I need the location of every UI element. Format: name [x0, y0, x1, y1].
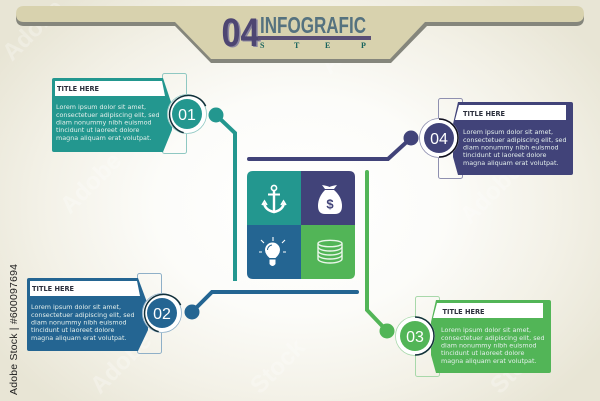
title: 04 INFOGRAFIC STEP: 04 — [222, 11, 260, 55]
title: 04 INFOGRAFIC STEP: P — [361, 41, 366, 50]
icon: anchor — [262, 185, 286, 212]
central icon grid — [247, 171, 355, 279]
heading: TITLE HERE — [32, 285, 75, 293]
panel: step 01 — [52, 74, 207, 154]
icon: coins — [318, 240, 342, 263]
connector 04 — [249, 130, 418, 159]
body text: consectetuer adipiscing elit, sed — [441, 334, 545, 342]
body text: Lorem ipsum dolor sit amet, — [31, 303, 121, 311]
icon: light bulb — [259, 237, 286, 266]
icon: money bag: $ — [326, 196, 334, 212]
stock watermark pattern: Adobe — [455, 157, 527, 229]
title: 04 INFOGRAFIC STEP: T — [294, 41, 300, 50]
header banner — [16, 6, 584, 63]
heading: TITLE HERE — [57, 85, 100, 93]
panel: step 04 — [419, 98, 573, 178]
number badge 01 — [167, 92, 207, 136]
title: 04 INFOGRAFIC STEP: S — [260, 41, 265, 50]
panel: step 02 — [27, 274, 182, 354]
stock watermark pattern: Stock — [245, 333, 311, 399]
body text: magna aliquam erat volutpat. — [463, 159, 558, 167]
body text: consectetuer adipiscing elit, sed — [463, 136, 567, 144]
body text: tincidunt ut laoreet dolore — [31, 326, 115, 334]
body text: tincidunt ut laoreet dolore — [56, 126, 140, 134]
body text: Lorem ipsum dolor sit amet, — [441, 326, 531, 334]
body text: magna aliquam erat volutpat. — [56, 134, 152, 142]
heading: TITLE HERE — [442, 308, 485, 316]
number badge 04: 04 — [430, 131, 448, 148]
body text: diam nonummy nibh euismod — [441, 342, 537, 350]
number badge 01: 01 — [178, 107, 196, 124]
stock watermark id: Adobe Stock | #600097694 — [8, 264, 20, 395]
connector 01 — [208, 108, 235, 281]
body text: consectetuer adipiscing elit, sed — [31, 311, 135, 319]
body text: tincidunt ut laoreet dolore — [463, 151, 547, 159]
body text: magna aliquam erat volutpat. — [441, 357, 536, 365]
body text: magna aliquam erat volutpat. — [31, 334, 126, 342]
stock watermark pattern: Adobe — [85, 327, 157, 399]
number badge 02: 02 — [153, 306, 171, 323]
body text: Lorem ipsum dolor sit amet, — [463, 128, 553, 136]
body text: tincidunt ut laoreet dolore — [441, 349, 525, 357]
body text: consectetuer adipiscing elit, sed — [56, 111, 160, 119]
body text — [56, 103, 160, 142]
stock watermark pattern: Stock — [485, 333, 551, 399]
panel: step 03 — [395, 296, 551, 376]
heading: TITLE HERE — [463, 110, 506, 118]
number badge 02 — [142, 291, 182, 335]
connector 03 — [367, 172, 394, 338]
body text: Lorem ipsum dolor sit amet, — [56, 103, 146, 111]
stock watermark pattern: Adobe — [315, 7, 387, 79]
title: 04 INFOGRAFIC STEP: INFOGRAFIC — [260, 12, 366, 38]
title: 04 INFOGRAFIC STEP: 04 — [223, 12, 262, 56]
connector 02 — [184, 292, 357, 320]
body text — [441, 326, 545, 365]
body text: diam nonummy nibh euismod — [31, 318, 127, 326]
body text — [31, 303, 135, 342]
number badge 03 — [395, 316, 435, 356]
stock watermark pattern: Adobe — [55, 147, 127, 219]
title: 04 INFOGRAFIC STEP: E — [325, 41, 330, 50]
body text: diam nonummy nibh euismod — [463, 144, 559, 152]
number badge 03: 03 — [406, 329, 424, 346]
body text — [463, 128, 567, 167]
title: 04 INFOGRAFIC STEP — [222, 11, 371, 56]
body text: diam nonummy nibh euismod — [56, 118, 152, 126]
number badge 04 — [419, 118, 459, 158]
